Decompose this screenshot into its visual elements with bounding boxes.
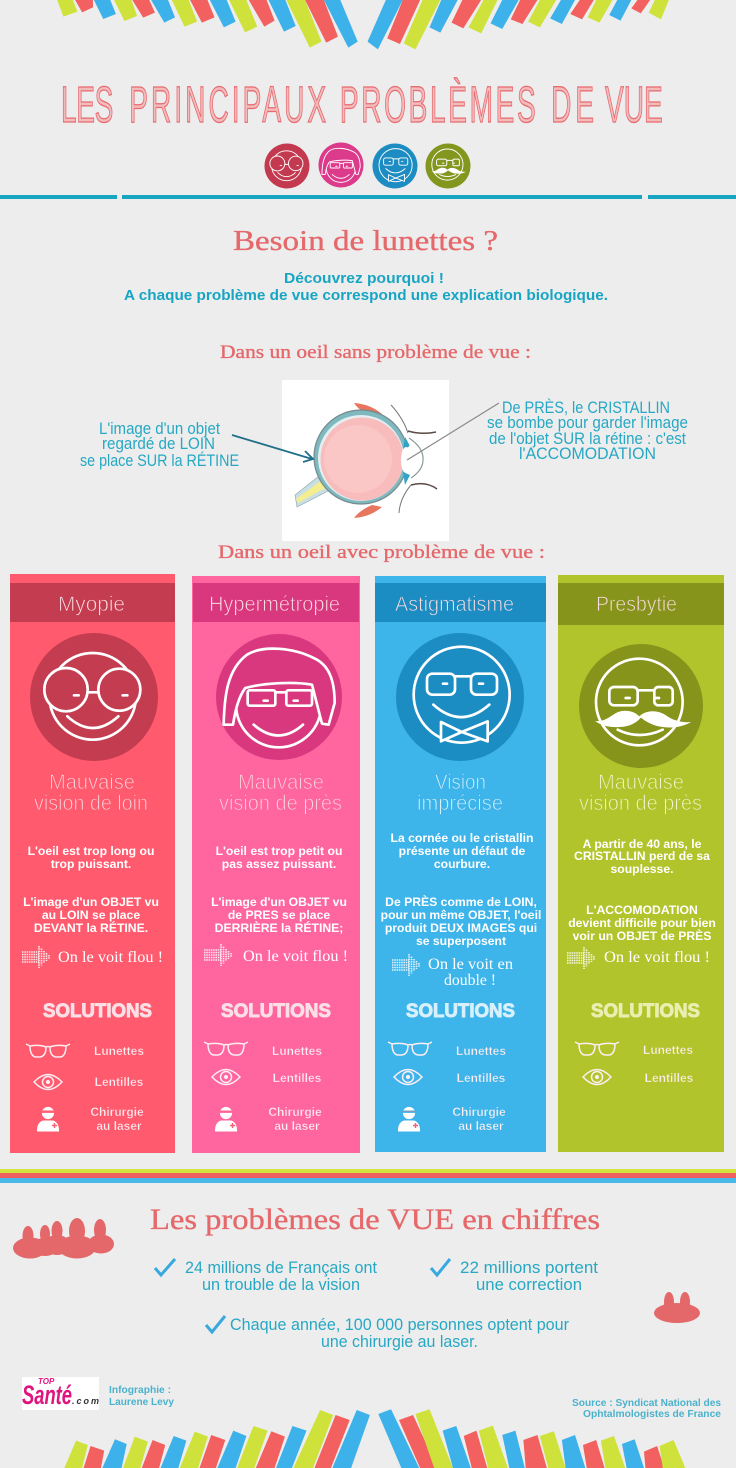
bottom ribbons — [64, 1409, 685, 1468]
eye diagram — [282, 380, 449, 541]
text: far image: se place SUR la RÉTINE — [80, 451, 239, 470]
vision label: Mauvaise — [598, 771, 684, 794]
solution: lenses — [394, 1070, 506, 1085]
vision label: vision de près — [219, 792, 342, 815]
explanation: voir un OBJET de PRÈS — [573, 928, 711, 943]
text: far image — [80, 420, 239, 470]
icon: myopia face — [264, 144, 310, 188]
subheading: healthy eye: Dans un oeil sans problème de vue : — [220, 342, 531, 363]
explanation — [568, 837, 716, 943]
solutions heading: SOLUTIONS — [406, 1001, 515, 1022]
solution: glasses — [575, 1042, 693, 1057]
solution: glasses: Lunettes — [272, 1044, 322, 1058]
solution: lenses — [212, 1070, 322, 1085]
icon: group of people left — [13, 1218, 114, 1258]
blur note: On le voit flou ! — [604, 949, 710, 966]
explanation: produit DEUX IMAGES qui — [385, 921, 537, 935]
credit: Infographie : — [109, 1385, 171, 1396]
check: 24 millions — [155, 1259, 377, 1294]
title: LES — [61, 76, 113, 133]
explanation: au LOIN se place — [42, 908, 140, 922]
credit — [109, 1385, 174, 1408]
solutions heading: SOLUTIONS — [221, 1001, 331, 1022]
title — [61, 76, 663, 133]
top ribbons — [57, 0, 669, 49]
explanation: trop puissant. — [51, 857, 131, 871]
icon: people right — [654, 1292, 700, 1323]
vision label: Mauvaise — [238, 771, 324, 794]
heading: Hypermétropie — [209, 593, 340, 616]
intro text: A chaque problème de vue correspond une explication biologique. — [124, 287, 608, 304]
explanation: DERRIÈRE la RÉTINE; — [215, 920, 343, 935]
solution: lenses: Lentilles — [95, 1075, 144, 1089]
explanation: L'oeil est trop petit ou — [216, 844, 342, 858]
solution: glasses: Lunettes — [94, 1044, 144, 1058]
solution: lenses — [583, 1070, 694, 1085]
title: PROBLÈMES — [340, 76, 536, 133]
solution: lenses: Lentilles — [645, 1071, 694, 1085]
solution: glasses — [388, 1042, 506, 1058]
face icon — [579, 644, 703, 768]
check: 22 millions: une correction — [476, 1276, 582, 1294]
heading: besoin de lunettes: Besoin de lunettes ? — [233, 225, 498, 257]
check: 24 millions: un trouble de la vision — [202, 1276, 360, 1294]
panel: presbytie — [558, 575, 724, 1152]
double vision note — [428, 956, 513, 989]
blur note: On le voit flou ! — [58, 949, 163, 966]
explanation — [381, 831, 541, 948]
blur note: On le voit flou ! — [243, 948, 348, 965]
vision label — [219, 771, 342, 815]
explanation: L'image d'un OBJET vu — [23, 895, 159, 909]
solutions heading: SOLUTIONS — [591, 1001, 700, 1022]
explanation: pour un même OBJET, l'oeil — [381, 908, 541, 922]
text: far image: L'image d'un objet — [99, 420, 220, 438]
icon: presbyopia face — [426, 144, 470, 188]
solution: glasses: Lunettes — [456, 1044, 506, 1058]
icon: dotted arrow — [392, 954, 419, 976]
vision label — [34, 771, 148, 815]
explanation: pas assez puissant. — [222, 857, 336, 871]
double vision note: double ! — [444, 972, 496, 989]
credit: Laurene Levy — [109, 1397, 174, 1408]
icon: dotted arrow — [22, 946, 49, 968]
mini face icons — [264, 142, 470, 188]
logo: top santé: .com — [72, 1396, 99, 1406]
explanation — [211, 844, 347, 935]
intro text — [124, 270, 608, 304]
icon: hyperopia face — [318, 142, 364, 188]
solution: surgery: au laser — [96, 1119, 142, 1133]
text: accommodation: l'ACCOMODATION — [519, 445, 656, 463]
explanation: souplesse. — [610, 862, 674, 876]
vision label — [417, 771, 503, 815]
vision label: Mauvaise — [49, 771, 135, 794]
face icon — [30, 633, 158, 761]
text: accommodation — [487, 398, 688, 463]
solution: surgery — [397, 1105, 506, 1133]
text: accommodation: de l'objet SUR la rétine : c'est — [489, 430, 686, 448]
heading: Presbytie — [596, 593, 677, 616]
vision label: vision de près — [579, 792, 702, 815]
explanation — [23, 844, 159, 935]
check: 100 000: Chaque année, 100 000 personnes optent pour — [230, 1316, 569, 1334]
explanation: A partir de 40 ans, le — [583, 837, 702, 851]
logo: top santé: TOP — [38, 1377, 55, 1386]
panel: hypermétropie — [192, 576, 360, 1153]
solution: glasses — [204, 1042, 322, 1058]
solution: surgery: au laser — [458, 1119, 504, 1133]
source: Ophtalmologistes de France — [583, 1408, 721, 1420]
solution: lenses: Lentilles — [457, 1071, 506, 1085]
face icon — [216, 634, 342, 760]
heading: Myopie — [58, 593, 125, 616]
solution: surgery: Chirurgie — [452, 1105, 506, 1119]
explanation: devient difficile pour bien — [568, 916, 716, 930]
icon: astigmatism face — [372, 144, 418, 188]
panel: astigmatisme — [375, 576, 546, 1152]
subheading: eye with a problem: Dans un oeil avec problème de vue : — [218, 542, 545, 563]
title: DE — [551, 76, 594, 133]
arrow: far image — [232, 435, 313, 462]
vision label: vision de loin — [34, 792, 148, 815]
double vision note: On le voit en — [428, 956, 513, 973]
explanation: L'oeil est trop long ou — [28, 844, 154, 858]
check: 22 millions — [431, 1259, 598, 1294]
text: accommodation: De PRÈS, le CRISTALLIN — [502, 398, 670, 417]
vision label — [579, 771, 702, 815]
solution: glasses — [26, 1044, 144, 1058]
explanation: se superposent — [416, 934, 506, 948]
logo: top santé: Santé — [22, 1380, 72, 1410]
explanation: DEVANT la RÉTINE. — [34, 920, 148, 935]
explanation: courbure. — [434, 857, 490, 871]
title: PRINCIPAUX — [129, 76, 326, 133]
solution: surgery — [36, 1105, 144, 1133]
solution: glasses: Lunettes — [643, 1043, 693, 1057]
text: far image: regardé de LOIN — [102, 435, 215, 453]
vision label: Vision — [435, 771, 486, 794]
solution: surgery: au laser — [274, 1119, 320, 1133]
arrow: accommodation — [407, 403, 499, 460]
explanation: La cornée ou le cristallin — [391, 831, 533, 845]
face icon — [396, 633, 524, 761]
explanation: de PRES se place — [228, 908, 330, 922]
heading: numbers: Les problèmes de VUE en chiffres — [150, 1203, 600, 1236]
icon: dotted arrow — [204, 944, 231, 966]
heading: Astigmatisme — [395, 593, 514, 616]
text: accommodation: se bombe pour garder l'image — [487, 414, 688, 432]
panel: myopie — [10, 574, 175, 1153]
check: 100 000: une chirurgie au laser. — [321, 1333, 478, 1351]
vision label: imprécise — [417, 792, 503, 815]
solution: surgery: Chirurgie — [268, 1105, 322, 1119]
check: 22 millions: 22 millions portent — [460, 1259, 598, 1277]
title: VUE — [605, 76, 663, 133]
solution: lenses: Lentilles — [273, 1071, 322, 1085]
check: 100 000 — [206, 1316, 569, 1351]
solution: surgery — [214, 1105, 322, 1133]
solution: lenses — [34, 1074, 144, 1090]
solution: surgery: Chirurgie — [90, 1105, 144, 1119]
source — [572, 1397, 721, 1420]
check: 24 millions: 24 millions de Français ont — [185, 1259, 377, 1277]
explanation: De PRÈS comme de LOIN, — [385, 894, 537, 909]
source: Source : Syndicat National des — [572, 1397, 721, 1409]
solutions heading: SOLUTIONS — [43, 1001, 152, 1022]
explanation: L'ACCOMODATION — [586, 903, 698, 917]
icon: dotted arrow — [567, 947, 594, 969]
explanation: CRISTALLIN perd de sa — [574, 849, 710, 863]
intro text: Découvrez pourquoi ! — [284, 270, 444, 287]
explanation: présente un défaut de — [399, 844, 526, 858]
explanation: L'image d'un OBJET vu — [211, 895, 347, 909]
